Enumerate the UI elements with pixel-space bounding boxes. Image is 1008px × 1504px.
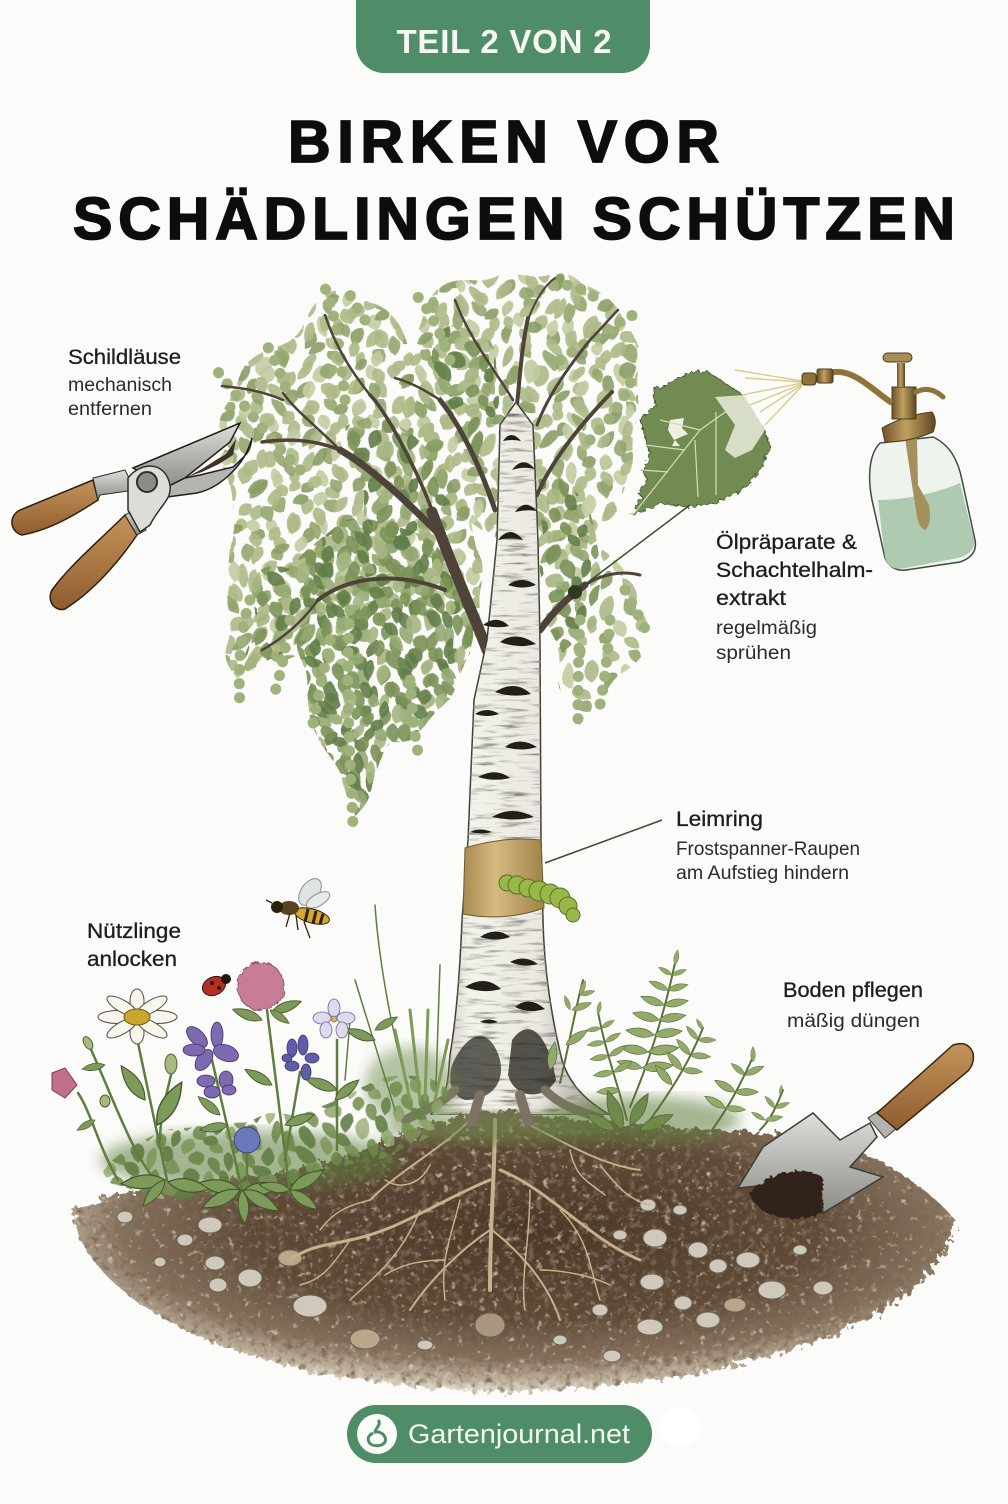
label: Ölpräparate: sprühen <box>716 643 791 664</box>
label: Leimring: Leimring <box>676 808 763 831</box>
debris on blade <box>187 439 236 477</box>
wet patch <box>715 395 765 458</box>
branches <box>222 278 640 650</box>
blades <box>133 423 240 487</box>
bark markings <box>450 435 556 1100</box>
faint white badge <box>660 1407 700 1447</box>
label: Ölpräparate: extrakt <box>716 587 786 610</box>
label: Schildläuse: entfernen <box>68 399 152 420</box>
pale flower <box>313 999 355 1038</box>
icon: caterpillar <box>499 875 580 922</box>
clover blossom <box>238 963 284 1010</box>
collar <box>882 412 935 442</box>
icon: pruning shears <box>12 423 252 610</box>
ferrule <box>868 1110 897 1138</box>
soil <box>72 1110 955 1392</box>
fern leaflets <box>546 949 790 1135</box>
moss around trunk base <box>380 1112 600 1144</box>
small pink bud <box>52 1068 77 1098</box>
stems <box>78 905 448 1193</box>
label: Nützlinge: anlocken <box>87 948 177 971</box>
logo <box>357 1414 397 1454</box>
liquid <box>878 483 974 569</box>
label: Boden pflegen: mäßig düngen <box>787 1011 920 1032</box>
glue ring band <box>463 839 544 917</box>
birch tree <box>218 274 650 1115</box>
label: Ölpräparate <box>568 505 873 664</box>
label: Nützlinge: Nützlinge <box>87 920 181 943</box>
label: Boden pflegen: Boden pflegen <box>783 979 923 1002</box>
buds <box>81 1035 177 1107</box>
pivot bolt <box>137 472 157 492</box>
label: Boden pflegen <box>783 979 923 1032</box>
root base flare <box>405 1090 600 1122</box>
title: BIRKEN VOR <box>288 109 719 175</box>
dip tube <box>905 438 930 530</box>
upper handle <box>12 480 98 535</box>
icon: spray bottle <box>802 353 975 570</box>
roots <box>290 1120 650 1320</box>
spray mist <box>735 370 802 425</box>
hanging leaf strands <box>218 285 648 825</box>
daisy <box>98 989 177 1044</box>
crown foliage <box>220 274 650 815</box>
header tab: TEIL 2 VON 2 <box>396 23 612 60</box>
left flower meadow <box>52 905 455 1224</box>
lower handle <box>50 515 137 610</box>
soil heap <box>750 1171 823 1219</box>
label: Schildläuse <box>68 346 181 420</box>
purple flowers <box>183 1022 319 1153</box>
icon: sprayed birch leaf <box>632 370 802 516</box>
stems <box>560 963 783 1130</box>
icon: garden trowel <box>738 1044 973 1219</box>
footer pill: Gartenjournal.net <box>408 1419 631 1449</box>
label: Nützlinge <box>87 920 181 971</box>
label: Leimring: am Aufstieg hindern <box>676 863 849 884</box>
pump <box>892 387 916 419</box>
leafy base <box>100 1076 450 1196</box>
handle <box>877 1044 973 1130</box>
label: Schildläuse: mechanisch <box>68 375 172 396</box>
label: Ölpräparate: Schachtelhalm- <box>716 559 873 582</box>
title <box>73 109 955 252</box>
nozzle arm <box>820 372 892 403</box>
blade <box>738 1113 883 1213</box>
label: Leimring: Frostspanner-Raupen <box>676 839 860 860</box>
stones <box>117 1199 833 1362</box>
metal ferrules <box>93 470 135 500</box>
title: SCHÄDLINGEN SCHÜTZEN <box>73 186 955 252</box>
footer pill <box>347 1405 652 1463</box>
label: Leimring <box>545 808 860 884</box>
right plants <box>540 949 790 1144</box>
label: Ölpräparate: Ölpräparate & <box>716 531 857 554</box>
label: Ölpräparate: regelmäßig <box>716 618 817 639</box>
glass jar <box>870 437 975 570</box>
header tab <box>356 0 650 73</box>
joint plate <box>128 466 170 532</box>
icon: wasp <box>266 875 332 938</box>
trunk <box>430 402 610 1115</box>
pointer line <box>568 505 690 599</box>
icon: ladybug <box>199 973 231 999</box>
stem leaves <box>75 997 400 1224</box>
label: Schildläuse: Schildläuse <box>68 346 181 369</box>
